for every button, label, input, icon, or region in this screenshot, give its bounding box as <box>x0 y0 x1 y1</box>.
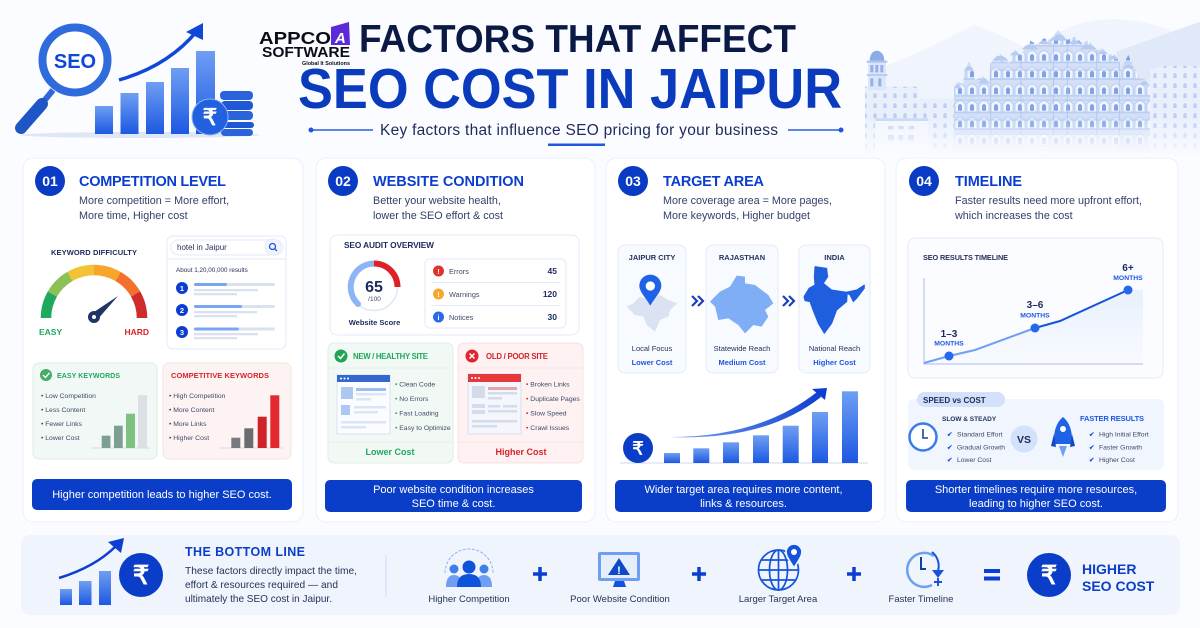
comparison: speed vs cost: Lower Cost <box>957 457 991 464</box>
card: old poor site: • Broken Links <box>526 382 570 388</box>
card: old poor site <box>458 343 583 463</box>
chart: SEO results timeline: 1–3 <box>941 329 958 340</box>
list: audit issues: Notices <box>449 313 474 322</box>
card: India: INDIA <box>824 253 845 262</box>
badge: 01: 01 <box>42 173 58 189</box>
logo: Appco Software <box>259 22 350 67</box>
heading: the bottom line: THE BOTTOM LINE <box>185 545 305 559</box>
chart: SEO results timeline: MONTHS <box>934 340 964 348</box>
card: old poor site: • Crawl Issues <box>526 425 570 432</box>
chart: SEO results timeline <box>908 238 1163 378</box>
comparison: speed vs cost <box>908 392 1164 470</box>
list: audit issues: ! <box>437 269 440 276</box>
text: bottom line summary <box>185 566 357 605</box>
illustration: Jaipur skyline <box>865 19 1200 160</box>
card: easy keywords: • Low Competition <box>41 393 96 400</box>
card: old poor site: • Duplicate Pages <box>526 396 580 403</box>
label: higher competition: Higher Competition <box>428 594 510 605</box>
panel: the bottom line <box>21 535 1180 615</box>
card: easy keywords: EASY KEYWORDS <box>57 373 120 380</box>
card: Jaipur city: Lower Cost <box>632 358 673 367</box>
description <box>954 195 1142 222</box>
subtitle: Key factors that influence SEO pricing for your business <box>380 122 778 139</box>
icon: website warning monitor: ! <box>617 565 621 577</box>
card: Jaipur city: JAIPUR CITY <box>629 253 675 262</box>
callout: timeline: Shorter timelines require more resources, <box>935 484 1137 496</box>
chart: SEO results timeline: SEO RESULTS TIMELINE <box>923 253 1008 262</box>
comparison: speed vs cost: Faster Growth <box>1099 444 1142 452</box>
heading: website condition: WEBSITE CONDITION <box>373 174 524 190</box>
callout: target area <box>615 480 872 512</box>
label: larger target area: Larger Target Area <box>739 594 818 605</box>
card: old poor site: OLD / POOR SITE <box>486 352 548 361</box>
description: Faster results need more upfront effort, <box>955 195 1142 207</box>
icon: clock <box>910 424 936 450</box>
callout: website condition: SEO time & cost. <box>412 498 495 510</box>
icon: rising bars and rupee <box>59 538 163 605</box>
card: India: National Reach <box>809 344 860 353</box>
text: bottom line summary: These factors directly impact the time, <box>185 566 357 577</box>
list: audit issues: i <box>438 315 440 322</box>
illustration: SEO magnifier with growth bars and coins: ₹ <box>203 104 218 130</box>
callout: timeline <box>906 480 1166 512</box>
icon: rupee result <box>1027 553 1071 597</box>
chart: website score donut: Website Score <box>349 318 400 327</box>
equals <box>984 571 1000 578</box>
comparison: speed vs cost: FASTER RESULTS <box>1080 414 1144 423</box>
chart: SEO results timeline: 6+ <box>1122 263 1134 274</box>
icon: rocket <box>1051 417 1075 457</box>
comparison: speed vs cost: Higher Cost <box>1099 457 1135 464</box>
card: competitive keywords: • More Content <box>169 407 215 414</box>
illustration: SEO magnifier with growth bars and coins: SEO <box>54 51 96 73</box>
comparison: speed vs cost: VS <box>1017 434 1031 446</box>
label: faster timeline: Faster Timeline <box>889 594 953 605</box>
card: new healthy site: • Fast Loading <box>395 410 439 418</box>
chart: rising cost bars <box>620 388 868 463</box>
description <box>663 195 832 222</box>
card: new healthy site: NEW / HEALTHY SITE <box>353 352 428 361</box>
description: which increases the cost <box>954 210 1073 222</box>
icon: rising bars and rupee: ₹ <box>133 560 149 590</box>
logo: Appco Software: APPCO <box>259 28 331 48</box>
panel: 04 timeline <box>896 158 1178 522</box>
gauge: keyword difficulty <box>39 248 149 337</box>
panel: 03 target area <box>606 158 885 522</box>
card: easy keywords <box>33 363 157 459</box>
description: More keywords, Higher budget <box>663 210 810 222</box>
search results mockup <box>167 236 286 349</box>
plus <box>847 567 861 581</box>
logo: Appco Software: Global It Solutions <box>302 61 350 67</box>
card: India <box>799 245 870 373</box>
card: Jaipur city <box>618 245 686 373</box>
icon: faster timeline clock <box>907 552 944 587</box>
card: India: Higher Cost <box>813 358 856 367</box>
gauge: keyword difficulty: KEYWORD DIFFICULTY <box>51 248 137 257</box>
comparison: speed vs cost: ✔ <box>947 432 953 438</box>
badge: 02 <box>328 166 358 196</box>
description <box>373 195 503 222</box>
illustration: SEO magnifier with growth bars and coins <box>20 23 260 138</box>
card: old poor site: • Slow Speed <box>526 410 567 418</box>
chart: SEO results timeline: MONTHS <box>1020 312 1050 320</box>
comparison: speed vs cost: ✔ <box>947 457 953 464</box>
logo: Appco Software: SOFTWARE <box>262 45 350 61</box>
comparison: speed vs cost: ✔ <box>1089 444 1095 452</box>
comparison: speed vs cost: Gradual Growth <box>957 444 1005 452</box>
card: Rajasthan: Statewide Reach <box>714 344 770 353</box>
plus <box>533 567 547 581</box>
list: audit issues: Warnings <box>449 290 480 299</box>
card: competitive keywords: COMPETITIVE KEYWORDS <box>171 371 269 380</box>
panel: 01 competition level <box>23 158 303 522</box>
card: Jaipur city: Local Focus <box>632 344 672 353</box>
description: Better your website health, <box>373 195 501 207</box>
icon: globe with pin <box>758 544 802 590</box>
card: Rajasthan: RAJASTHAN <box>719 253 765 262</box>
search results mockup: 1 <box>180 284 184 293</box>
chart: SEO results timeline: MONTHS <box>1113 275 1143 282</box>
icon: higher competition <box>445 549 493 587</box>
badge: 04 <box>909 166 939 196</box>
search results mockup: About 1,20,00,000 results <box>176 267 248 274</box>
card: competitive keywords: • More Links <box>169 421 207 428</box>
chart: website score donut: 65 <box>365 279 383 296</box>
chart: website score donut: /100 <box>368 296 381 303</box>
callout: target area: Wider target area requires more content, <box>644 484 843 496</box>
callout: competition <box>32 479 292 510</box>
list: audit issues: 30 <box>548 312 557 322</box>
card: new healthy site: • No Errors <box>395 396 429 403</box>
label: poor website condition: Poor Website Condition <box>570 594 670 605</box>
list: audit issues: ! <box>437 292 440 299</box>
card: Rajasthan: Medium Cost <box>718 358 766 367</box>
badge: 02: 02 <box>335 173 351 189</box>
badge: 03: 03 <box>625 173 641 189</box>
text: bottom line summary: effort & resources required — and <box>185 580 338 591</box>
search results mockup: 2 <box>180 306 184 315</box>
card: easy keywords: • Less Content <box>41 407 85 414</box>
logo: Appco Software: A <box>334 30 346 47</box>
list: audit issues <box>425 259 566 328</box>
panel: 02 website condition <box>316 158 595 522</box>
title: SEO COST IN JAIPUR <box>298 57 842 121</box>
comparison: speed vs cost: ✔ <box>947 444 953 452</box>
comparison: speed vs cost: Standard Effort <box>957 432 1003 438</box>
card: Rajasthan <box>706 245 778 373</box>
comparison: speed vs cost: ✔ <box>1089 457 1095 464</box>
chart: rising cost bars: ₹ <box>632 438 644 458</box>
card: new healthy site: • Easy to Optimize <box>395 425 451 432</box>
heading: competition level: COMPETITION LEVEL <box>79 174 226 190</box>
card: new healthy site: • Clean Code <box>395 382 435 388</box>
list: audit issues: 45 <box>548 266 557 276</box>
card: competitive keywords: • Higher Cost <box>169 435 209 442</box>
callout: target area: links & resources. <box>700 498 787 510</box>
comparison: speed vs cost: High Initial Effort <box>1099 432 1149 438</box>
badge: 01 <box>35 166 65 196</box>
result: higher SEO cost: HIGHER <box>1082 561 1136 577</box>
card: easy keywords: • Fewer Links <box>41 421 83 428</box>
chart: website score donut <box>349 264 400 327</box>
search results mockup: 3 <box>180 328 184 337</box>
callout: timeline: leading to higher SEO cost. <box>969 498 1103 510</box>
panel: SEO audit overview: SEO AUDIT OVERVIEW <box>344 240 434 250</box>
card: competitive keywords: • High Competition <box>169 393 226 400</box>
comparison: speed vs cost: ✔ <box>1089 432 1095 438</box>
icon: website warning monitor <box>598 552 640 587</box>
description: More time, Higher cost <box>79 210 188 222</box>
callout: website condition: Poor website condition increases <box>373 484 534 496</box>
heading: timeline: TIMELINE <box>955 174 1022 190</box>
title: FACTORS THAT AFFECT <box>359 18 796 61</box>
gauge: keyword difficulty: HARD <box>124 327 149 337</box>
description: More competition = More effort, <box>79 195 229 207</box>
card: easy keywords: • Lower Cost <box>41 435 80 442</box>
search results mockup: hotel in Jaipur <box>177 243 227 252</box>
callout: competition: Higher competition leads to higher SEO cost. <box>52 489 272 501</box>
arrow: city to state <box>692 296 703 306</box>
description <box>79 195 229 222</box>
plus <box>692 567 706 581</box>
heading: target area: TARGET AREA <box>663 174 765 190</box>
panel: SEO audit overview <box>330 235 579 335</box>
card: competitive keywords <box>163 363 291 459</box>
list: audit issues: Errors <box>449 267 469 276</box>
card: old poor site: Higher Cost <box>495 447 547 457</box>
card: new healthy site: Lower Cost <box>365 447 415 457</box>
arrow: state to nation <box>783 296 794 306</box>
card: new healthy site <box>328 343 453 463</box>
icon: rupee result: ₹ <box>1041 560 1057 590</box>
chart: SEO results timeline: 3–6 <box>1027 300 1044 311</box>
subtitle <box>308 122 844 146</box>
gauge: keyword difficulty: EASY <box>39 327 62 337</box>
result: higher SEO cost <box>1082 561 1155 594</box>
comparison: speed vs cost: SLOW & STEADY <box>942 416 997 423</box>
text: bottom line summary: ultimately the SEO cost in Jaipur. <box>185 594 332 605</box>
badge: 03 <box>618 166 648 196</box>
description: lower the SEO effort & cost <box>373 210 503 222</box>
description: More coverage area = More pages, <box>663 195 832 207</box>
result: higher SEO cost: SEO COST <box>1082 578 1155 594</box>
list: audit issues: 120 <box>543 289 557 299</box>
title <box>298 18 842 121</box>
callout: website condition <box>325 480 582 512</box>
badge: 04: 04 <box>916 173 932 189</box>
comparison: speed vs cost: SPEED vs COST <box>923 396 986 405</box>
